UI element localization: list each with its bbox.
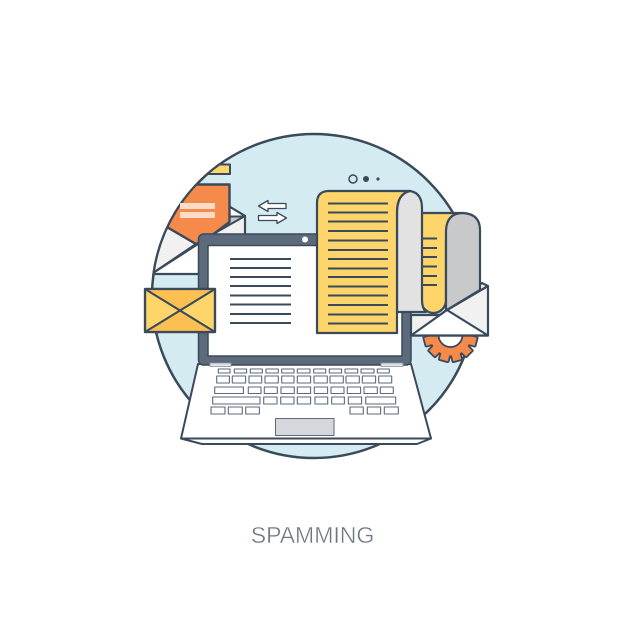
first grey roll <box>397 191 426 312</box>
keyboard <box>211 369 398 414</box>
right envelope <box>411 213 488 336</box>
icon: three dots <box>349 175 380 183</box>
camera <box>302 236 308 242</box>
left envelope with orange letter <box>150 164 245 274</box>
laptop screen <box>198 234 411 365</box>
orange letter <box>168 186 228 242</box>
screen text lines <box>230 259 291 323</box>
grey roll <box>446 213 480 310</box>
background circle <box>152 134 476 458</box>
illustration: spamming <box>144 132 490 543</box>
second sheet lines <box>422 238 437 285</box>
small yellow sheet <box>200 164 230 174</box>
icon: exchange arrows <box>258 200 286 224</box>
envelope body <box>154 246 198 274</box>
gear <box>422 336 479 364</box>
laptop base <box>181 438 431 444</box>
second yellow sheet <box>420 213 462 313</box>
laptop <box>181 234 431 444</box>
yellow envelope <box>145 289 215 332</box>
label: spamming: SPAMMING <box>251 522 374 548</box>
circle outline over envelope <box>154 164 220 273</box>
hinges <box>210 363 403 366</box>
main sheet lines <box>328 204 388 324</box>
scroll document <box>317 191 462 333</box>
main yellow sheet <box>317 191 410 333</box>
trackpad <box>276 418 334 436</box>
letter text bars <box>180 203 215 218</box>
